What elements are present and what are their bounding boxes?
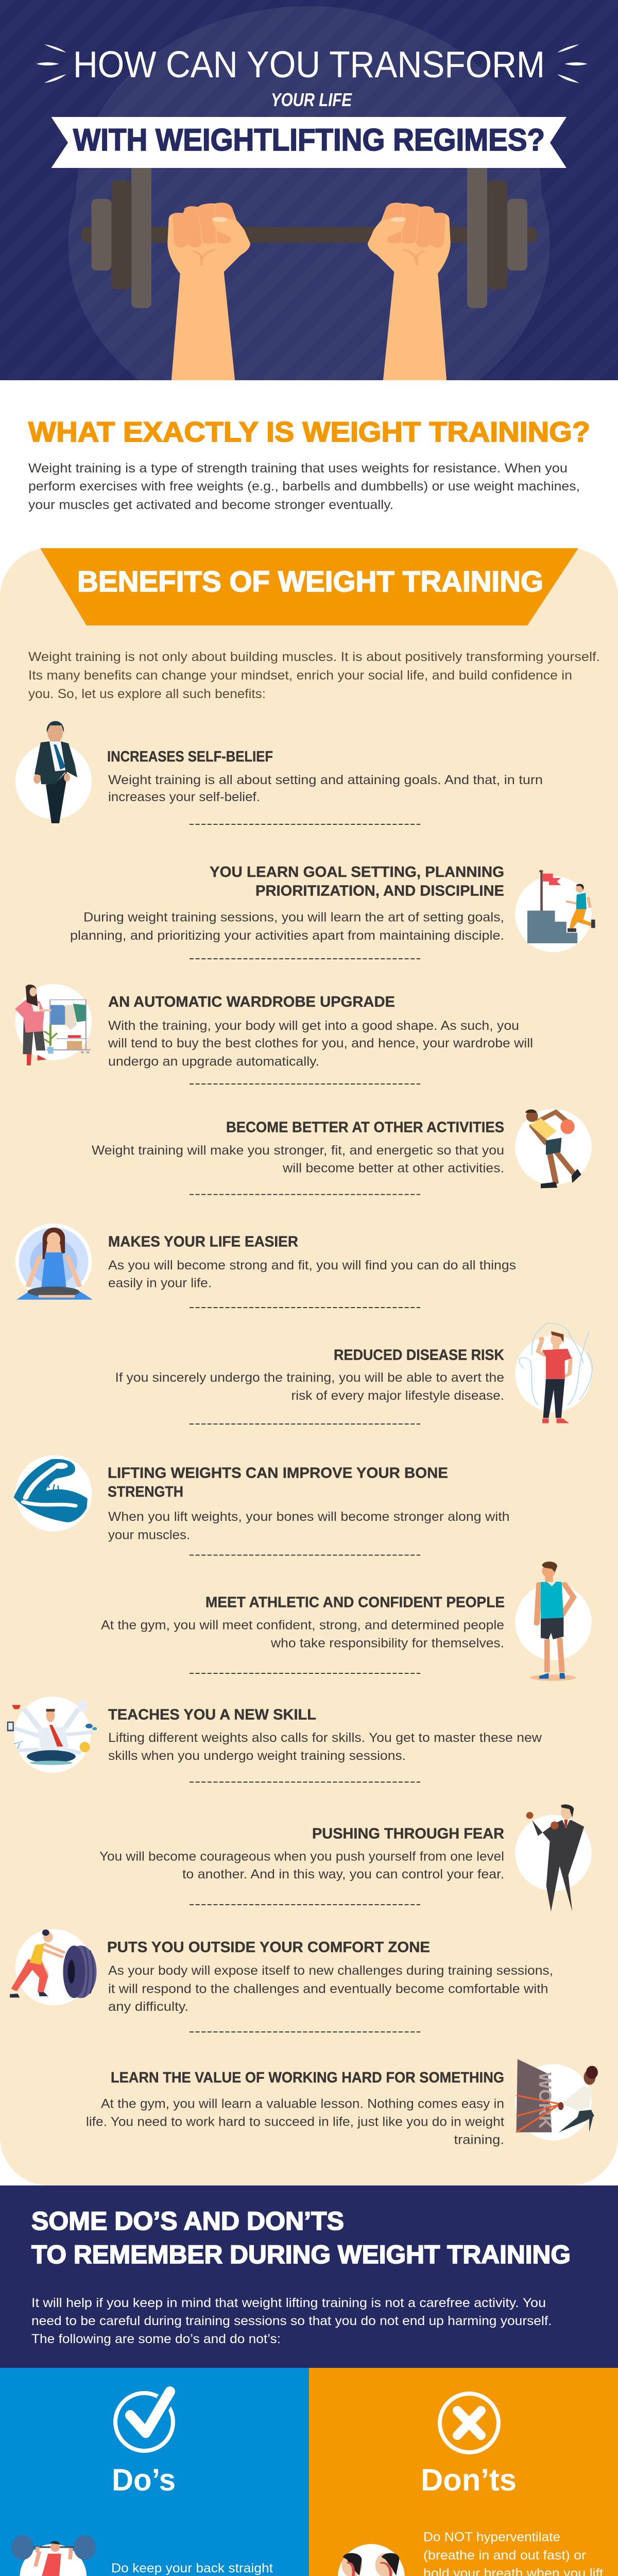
icon: title sparks <box>36 44 588 83</box>
icon: man pulling WORK block: WORK <box>535 2072 555 2129</box>
icon: businessman <box>15 721 92 823</box>
paragraph: your muscles get activated and become stronger eventually. <box>28 498 393 512</box>
icon: boxer in suit <box>515 1804 592 1911</box>
icon: woman pushing tire <box>10 1929 96 2006</box>
benefit 10 text: PUSHING THROUGH FEAR <box>312 1826 504 1842</box>
panel: header <box>0 0 618 380</box>
don't 1 text: (breathe in and out fast) or <box>423 2548 586 2563</box>
icon: overhead barbell squat <box>11 2535 96 2576</box>
icon: check mark <box>115 2392 173 2451</box>
benefit 2 text: During weight training sessions, you will learn the art of setting goals, <box>83 910 504 924</box>
heading: WHAT EXACTLY IS WEIGHT TRAINING? <box>28 416 590 448</box>
header background circle <box>68 6 550 380</box>
benefit 2 text: YOU LEARN GOAL SETTING, PLANNING <box>210 864 504 880</box>
benefit 3 text: will tend to buy the best clothes for you, and hence, your wardrobe will <box>108 1036 533 1050</box>
benefit 6 text: risk of every major lifestyle disease. <box>291 1388 504 1403</box>
benefit 9 text: Lifting different weights also calls for skills. You get to master these new <box>108 1731 542 1745</box>
benefit 4 text: BECOME BETTER AT OTHER ACTIVITIES <box>226 1119 504 1136</box>
benefits heading ribbon: BENEFITS OF WEIGHT TRAINING <box>77 565 543 598</box>
don't 1 text: Do NOT hyperventilate <box>423 2530 560 2544</box>
title banner: WITH WEIGHTLIFTING REGIMES? <box>73 123 545 157</box>
heading: Don’ts <box>421 2463 517 2497</box>
benefit 7 text: your muscles. <box>108 1528 190 1543</box>
benefit 8 text: MEET ATHLETIC AND CONFIDENT PEOPLE <box>205 1594 505 1611</box>
title line 1: HOW CAN YOU TRANSFORM <box>73 44 545 86</box>
benefit 4 text: will become better at other activities. <box>282 1161 504 1176</box>
benefit 7 text <box>108 1465 510 1543</box>
title banner <box>52 117 566 168</box>
benefit 7 text: STRENGTH <box>108 1484 183 1500</box>
panel: what exactly is weight training <box>28 416 590 512</box>
benefit 3 text: With the training, your body will get into a good shape. As such, you <box>108 1019 519 1033</box>
benefit 1 text <box>107 749 543 804</box>
paragraph: perform exercises with free weights (e.g., barbells and dumbbells) or use weight machines, <box>28 479 580 494</box>
benefit 11 text <box>107 1939 553 2014</box>
benefit 3 text <box>108 994 533 1069</box>
section heading: SOME DO’S AND DON’TS <box>31 2207 344 2235</box>
benefit 4 text <box>92 1119 504 1176</box>
benefit 3 text: undergo an upgrade automatically. <box>108 1054 319 1069</box>
icon: strong arm with bone <box>5 1446 92 1532</box>
benefit 12 text: life. You need to work hard to succeed in life, just like you do in weight <box>86 2114 504 2129</box>
benefit 6 text <box>115 1347 504 1403</box>
illustration: right hand and arm <box>368 202 451 380</box>
paragraph <box>28 461 580 512</box>
benefit 12 text: LEARN THE VALUE OF WORKING HARD FOR SOMETHING <box>111 2070 504 2086</box>
benefit 5 text: As you will become strong and fit, you will find you can do all things <box>108 1258 516 1273</box>
benefit 9 text <box>108 1706 542 1763</box>
icon: woman at wardrobe <box>15 984 92 1065</box>
benefit 10 text: You will become courageous when you push yourself from one level <box>99 1850 504 1864</box>
icon: meditating woman <box>15 1224 93 1300</box>
benefit 8 text: who take responsibility for themselves. <box>270 1636 504 1651</box>
benefit 9 text: TEACHES YOU A NEW SKILL <box>108 1706 316 1723</box>
benefit 12 text: At the gym, you will learn a valuable lesson. Nothing comes easy in <box>101 2097 504 2111</box>
benefit 10 text: to another. And in this way, you can control your fear. <box>182 1867 504 1882</box>
benefit 11 text: any difficulty. <box>108 1999 188 2014</box>
benefit 11 text: As your body will expose itself to new challenges during training sessions, <box>108 1963 553 1978</box>
panel: do's <box>0 2368 309 2576</box>
do 1 text: Do keep your back straight <box>111 2561 273 2575</box>
intro paragraph: Its many benefits can change your mindset, enrich your social life, and build confidence in <box>28 668 572 683</box>
section paragraph: It will help if you keep in mind that weight lifting training is not a carefree activity. You <box>31 2296 546 2310</box>
benefit 8 text <box>101 1594 505 1651</box>
section paragraph: need to be careful during training sessions so that you do not end up harming yourself. <box>31 2314 552 2328</box>
benefit 10 text <box>99 1826 504 1882</box>
panel: benefits of weight training <box>0 548 618 2185</box>
icon: athletic man <box>515 1562 592 1681</box>
panel: do's and don'ts intro <box>0 2185 618 2368</box>
section heading: TO REMEMBER DURING WEIGHT TRAINING <box>31 2240 571 2269</box>
benefit 7 text: When you lift weights, your bones will become stronger along with <box>108 1510 510 1524</box>
benefit 1 text: Weight training is all about setting and attaining goals. And that, in turn <box>108 773 543 787</box>
benefit 5 text <box>108 1233 516 1290</box>
icon: man pulling WORK block <box>515 2059 598 2141</box>
section paragraph: The following are some do’s and do not’s: <box>31 2332 281 2346</box>
benefit 12 text: training. <box>454 2133 504 2147</box>
benefit 5 text: easily in your life. <box>108 1276 212 1290</box>
illustration: barbell <box>81 161 537 308</box>
icon: multitasking man <box>7 1697 97 1773</box>
benefit 3 text: AN AUTOMATIC WARDROBE UPGRADE <box>108 994 395 1010</box>
benefit 11 text: PUTS YOU OUTSIDE YOUR COMFORT ZONE <box>107 1939 430 1956</box>
paragraph: Weight training is a type of strength training that uses weights for resistance. When you <box>28 461 568 476</box>
icon: healthy man flexing <box>515 1323 592 1423</box>
panel: don'ts <box>309 2368 618 2576</box>
illustration: left hand and arm <box>167 202 250 380</box>
heading: Do’s <box>112 2463 176 2497</box>
intro paragraph <box>28 650 600 701</box>
benefit 8 text: At the gym, you will meet confident, strong, and determined people <box>101 1618 504 1632</box>
icon: x mark <box>440 2394 499 2452</box>
benefit 9 text: skills when you undergo weight training sessions. <box>108 1749 406 1763</box>
icon: flag and stairs runner <box>515 870 595 952</box>
title script: your life: YOUR LIFE <box>271 89 352 110</box>
section paragraph <box>31 2296 552 2346</box>
intro paragraph: Weight training is not only about building muscles. It is about positively transforming yourself. <box>28 650 600 664</box>
benefit 7 text: LIFTING WEIGHTS CAN IMPROVE YOUR BONE <box>108 1465 448 1482</box>
benefit 4 text: Weight training will make you stronger, fit, and energetic so that you <box>92 1143 504 1158</box>
benefit 6 text: REDUCED DISEASE RISK <box>334 1347 504 1363</box>
benefit 1 text: increases your self-belief. <box>108 790 260 804</box>
benefit 2 text <box>70 864 504 943</box>
intro paragraph: you. So, let us explore all such benefits: <box>28 687 266 701</box>
benefit 6 text: If you sincerely undergo the training, you will be able to avert the <box>115 1370 504 1385</box>
section heading <box>31 2207 571 2269</box>
benefits heading ribbon <box>40 548 578 625</box>
icon: inhalation and exhalation <box>337 2544 405 2576</box>
icon: athlete with ball <box>515 1109 592 1188</box>
benefit 12 text <box>86 2070 504 2147</box>
benefit 2 text: PRIORITIZATION, AND DISCIPLINE <box>255 883 504 900</box>
benefit 11 text: it will respond to the challenges and eventually become comfortable with <box>108 1981 548 1996</box>
don't 1 text <box>423 2530 612 2576</box>
benefit 1 text: INCREASES SELF-BELIEF <box>107 749 273 765</box>
benefit 5 text: MAKES YOUR LIFE EASIER <box>108 1233 298 1250</box>
benefit 2 text: planning, and prioritizing your activities apart from maintaining disciple. <box>70 928 504 943</box>
